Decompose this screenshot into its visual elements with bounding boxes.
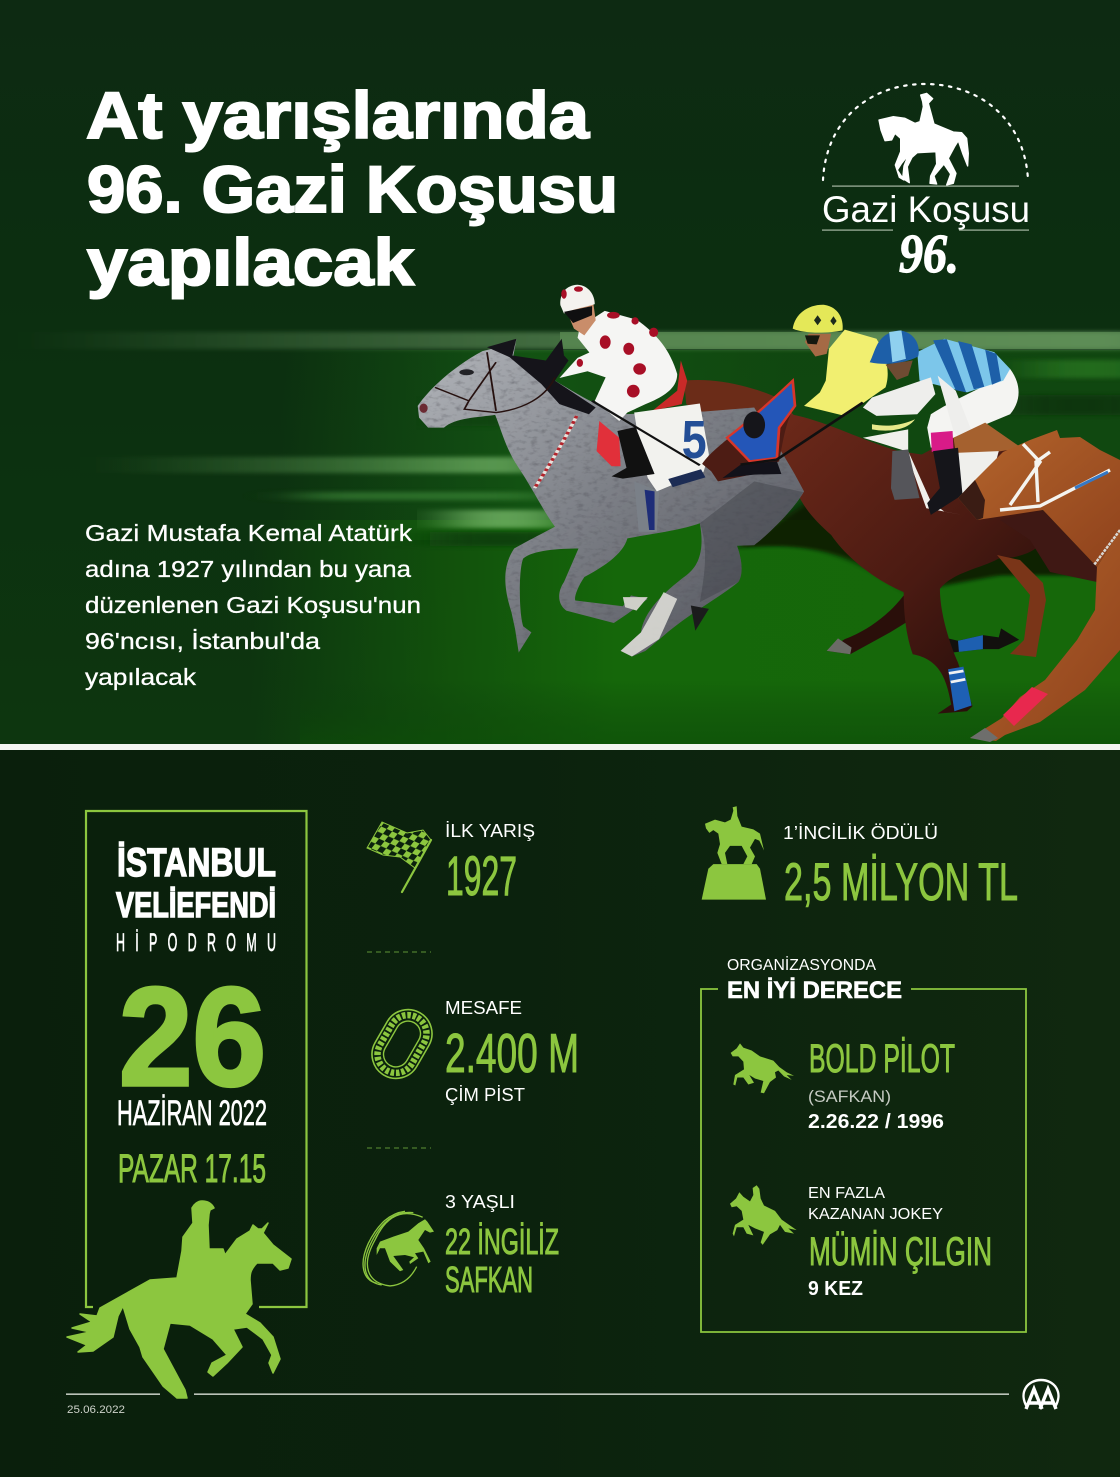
- panel: hero background: [0, 203, 1120, 744]
- horse: orange front right: [958, 430, 1120, 742]
- girth blue: [645, 490, 655, 530]
- win count: 9 KEZ: [808, 1278, 863, 1300]
- bandage white stripes: [949, 671, 965, 682]
- jockey 1 red dots: [561, 286, 658, 397]
- icon: statue trophy: [702, 806, 766, 900]
- intro paragraph: [85, 520, 421, 690]
- jockey 3 white arm: [863, 376, 990, 463]
- jockey 3 blue silks: [917, 339, 1010, 392]
- jockey 3 boot: [927, 448, 963, 515]
- jockey 3 white cloth: [956, 451, 999, 495]
- brown hind leg: [997, 555, 1046, 657]
- label: 3 YAŞLI: [445, 1192, 515, 1212]
- horse: far hind leg brown: [826, 596, 906, 654]
- date number: 26: [119, 958, 266, 1115]
- logo: Gazi Koşusu 96: [822, 84, 1030, 284]
- intro paragraph: 96'ncısı, İstanbul'da: [85, 628, 321, 654]
- box frame: [86, 811, 306, 1307]
- icon: large horse and jockey silhouette: [67, 1201, 291, 1398]
- intro paragraph: yapılacak: [85, 664, 196, 690]
- icon: race track: [363, 1001, 441, 1087]
- jockey 3 blue stripes: [933, 339, 1001, 392]
- thoroughbred label: (SAFKAN): [808, 1087, 891, 1106]
- sublabel: ÇİM PİST: [445, 1085, 525, 1105]
- leg wrap dark: [949, 628, 1019, 652]
- most wins label: EN FAZLA: [808, 1185, 885, 1202]
- jockey 2 helmet diamonds: [814, 315, 837, 325]
- intro paragraph: Gazi Mustafa Kemal Atatürk: [85, 520, 412, 546]
- value line 1: 22 İNGİLİZ: [445, 1221, 559, 1262]
- record time: 2.26.22 / 1996: [808, 1111, 944, 1133]
- jockey name: MÜMİN ÇILGIN: [809, 1229, 992, 1274]
- value: 2.400 M: [445, 1022, 579, 1084]
- far rump orange: [953, 423, 1021, 455]
- title: yapılacak: [87, 225, 414, 299]
- icon: running horse: [731, 1043, 794, 1093]
- venue name: İSTANBUL: [117, 841, 276, 885]
- jockey 1 boot: [612, 427, 655, 479]
- logo number 96: 96.: [899, 223, 959, 284]
- neck strap: [1094, 530, 1120, 565]
- title: At yarışlarında: [86, 78, 590, 152]
- hippodrome label: HİPODROMU: [116, 928, 276, 957]
- record holder name: BOLD PİLOT: [809, 1036, 955, 1081]
- number 5: 5: [682, 409, 707, 470]
- white divider band: [0, 744, 1120, 750]
- logo left rule: [822, 230, 893, 231]
- lower leg blue bandage: [948, 667, 972, 711]
- venue name second line: VELİEFENDİ: [116, 886, 276, 925]
- panel: venue and date box: [86, 811, 306, 1307]
- jockey 1 face: [570, 304, 596, 336]
- dotted arc: [823, 84, 1028, 180]
- girth grey pad: [891, 449, 920, 500]
- horse: brown centre body: [781, 414, 1041, 714]
- grey horse hoof: [623, 597, 648, 611]
- item: first race: [367, 821, 535, 907]
- month year: HAZİRAN 2022: [117, 1094, 267, 1133]
- jockey 3 helmet stripe: [889, 330, 906, 362]
- icon: horse on track: [363, 1211, 434, 1286]
- logo wordmark: Gazi Koşusu: [822, 189, 1030, 230]
- grey horse nostril: [420, 404, 428, 413]
- panel: best results: [701, 955, 1026, 1332]
- brown horse reins: [741, 402, 863, 465]
- value line 2: SAFKAN: [445, 1259, 533, 1300]
- label: İLK YARIŞ: [445, 821, 535, 841]
- shadow under the horses: [736, 495, 1120, 592]
- panel heading: EN İYİ DERECE: [727, 977, 902, 1004]
- jockey 1 whip: [592, 401, 700, 465]
- logo top rule: [832, 186, 1019, 187]
- leg wrap blue accent: [958, 635, 983, 652]
- panel: lower background: [0, 750, 1120, 1477]
- jockey 2 face: [805, 334, 831, 357]
- jockey 3 white trousers: [927, 369, 1019, 448]
- grey horse lower shading: [700, 481, 803, 602]
- blue rein: [1075, 472, 1108, 488]
- saddle white cloth: [863, 429, 963, 515]
- jockey 1 goggles: [564, 306, 592, 323]
- jockey 2 helmet: [793, 305, 843, 333]
- most wins label line 2: KAZANAN JOKEY: [808, 1206, 943, 1223]
- saddle cloth number: [634, 404, 709, 491]
- white bridle: [1000, 444, 1110, 510]
- item: distance: [363, 998, 579, 1105]
- icon: horse and jockey: [730, 1185, 797, 1245]
- item: participants: [363, 1192, 559, 1300]
- horses and jockeys photo illustration: [418, 285, 1120, 714]
- panel frame: [701, 989, 1026, 1332]
- rope red: [535, 416, 577, 488]
- muzzle dark: [958, 480, 985, 520]
- jockey 1 helmet: [560, 285, 595, 314]
- value: 1927: [446, 844, 517, 907]
- date stamp: 25.06.2022: [67, 1404, 125, 1416]
- saddle cloth label: [668, 469, 705, 487]
- grey horse white sock: [621, 592, 677, 657]
- horse: grey lead: [418, 339, 804, 657]
- jockey 2 goggles: [805, 335, 820, 344]
- item: first prize: [702, 806, 1018, 912]
- brown horse head with hood: [702, 381, 795, 481]
- label: MESAFE: [445, 998, 522, 1018]
- title: 96. Gazi Koşusu: [87, 152, 618, 226]
- icon: AA agency logo: [1024, 1380, 1058, 1409]
- rope white: [535, 416, 577, 488]
- orange head and neck: [958, 430, 1120, 567]
- day time: PAZAR 17.15: [118, 1147, 266, 1191]
- orange hoof: [970, 728, 998, 742]
- jockey 2 yellow body: [804, 330, 888, 416]
- title: [86, 78, 618, 299]
- horse: far brown neck: [685, 380, 794, 415]
- logo right rule: [959, 230, 1029, 231]
- jockey 1 body: [559, 311, 677, 421]
- jockey 3 face: [886, 361, 913, 380]
- icon: horse and rider statue: [879, 93, 968, 185]
- footer: [66, 1380, 1058, 1416]
- saddle red upper: [652, 361, 687, 411]
- label: 1’İNCİLİK ÖDÜLÜ: [783, 823, 938, 843]
- jockey 3 pink sock: [931, 431, 953, 452]
- red bandage: [1003, 687, 1048, 726]
- saddle cloth red: [597, 421, 621, 466]
- orange chest and leg: [970, 530, 1120, 741]
- grey horse mane: [487, 339, 596, 414]
- hoof far: [827, 638, 852, 654]
- grey horse rear dark hoof: [691, 606, 709, 631]
- grey horse bridle: [435, 352, 555, 413]
- girth strap: [634, 481, 659, 532]
- jockey 3 helmet: [870, 330, 919, 364]
- dark bay body behind: [1000, 510, 1097, 582]
- icon: checkered flag: [367, 822, 431, 892]
- intro paragraph: düzenlenen Gazi Koşusu'nun: [85, 592, 421, 618]
- intro paragraph: adına 1927 yılından bu yana: [85, 556, 412, 582]
- grey horse eye: [459, 369, 474, 375]
- kicker: ORGANİZASYONDA: [727, 955, 876, 974]
- saddle yellow pad: [872, 419, 915, 431]
